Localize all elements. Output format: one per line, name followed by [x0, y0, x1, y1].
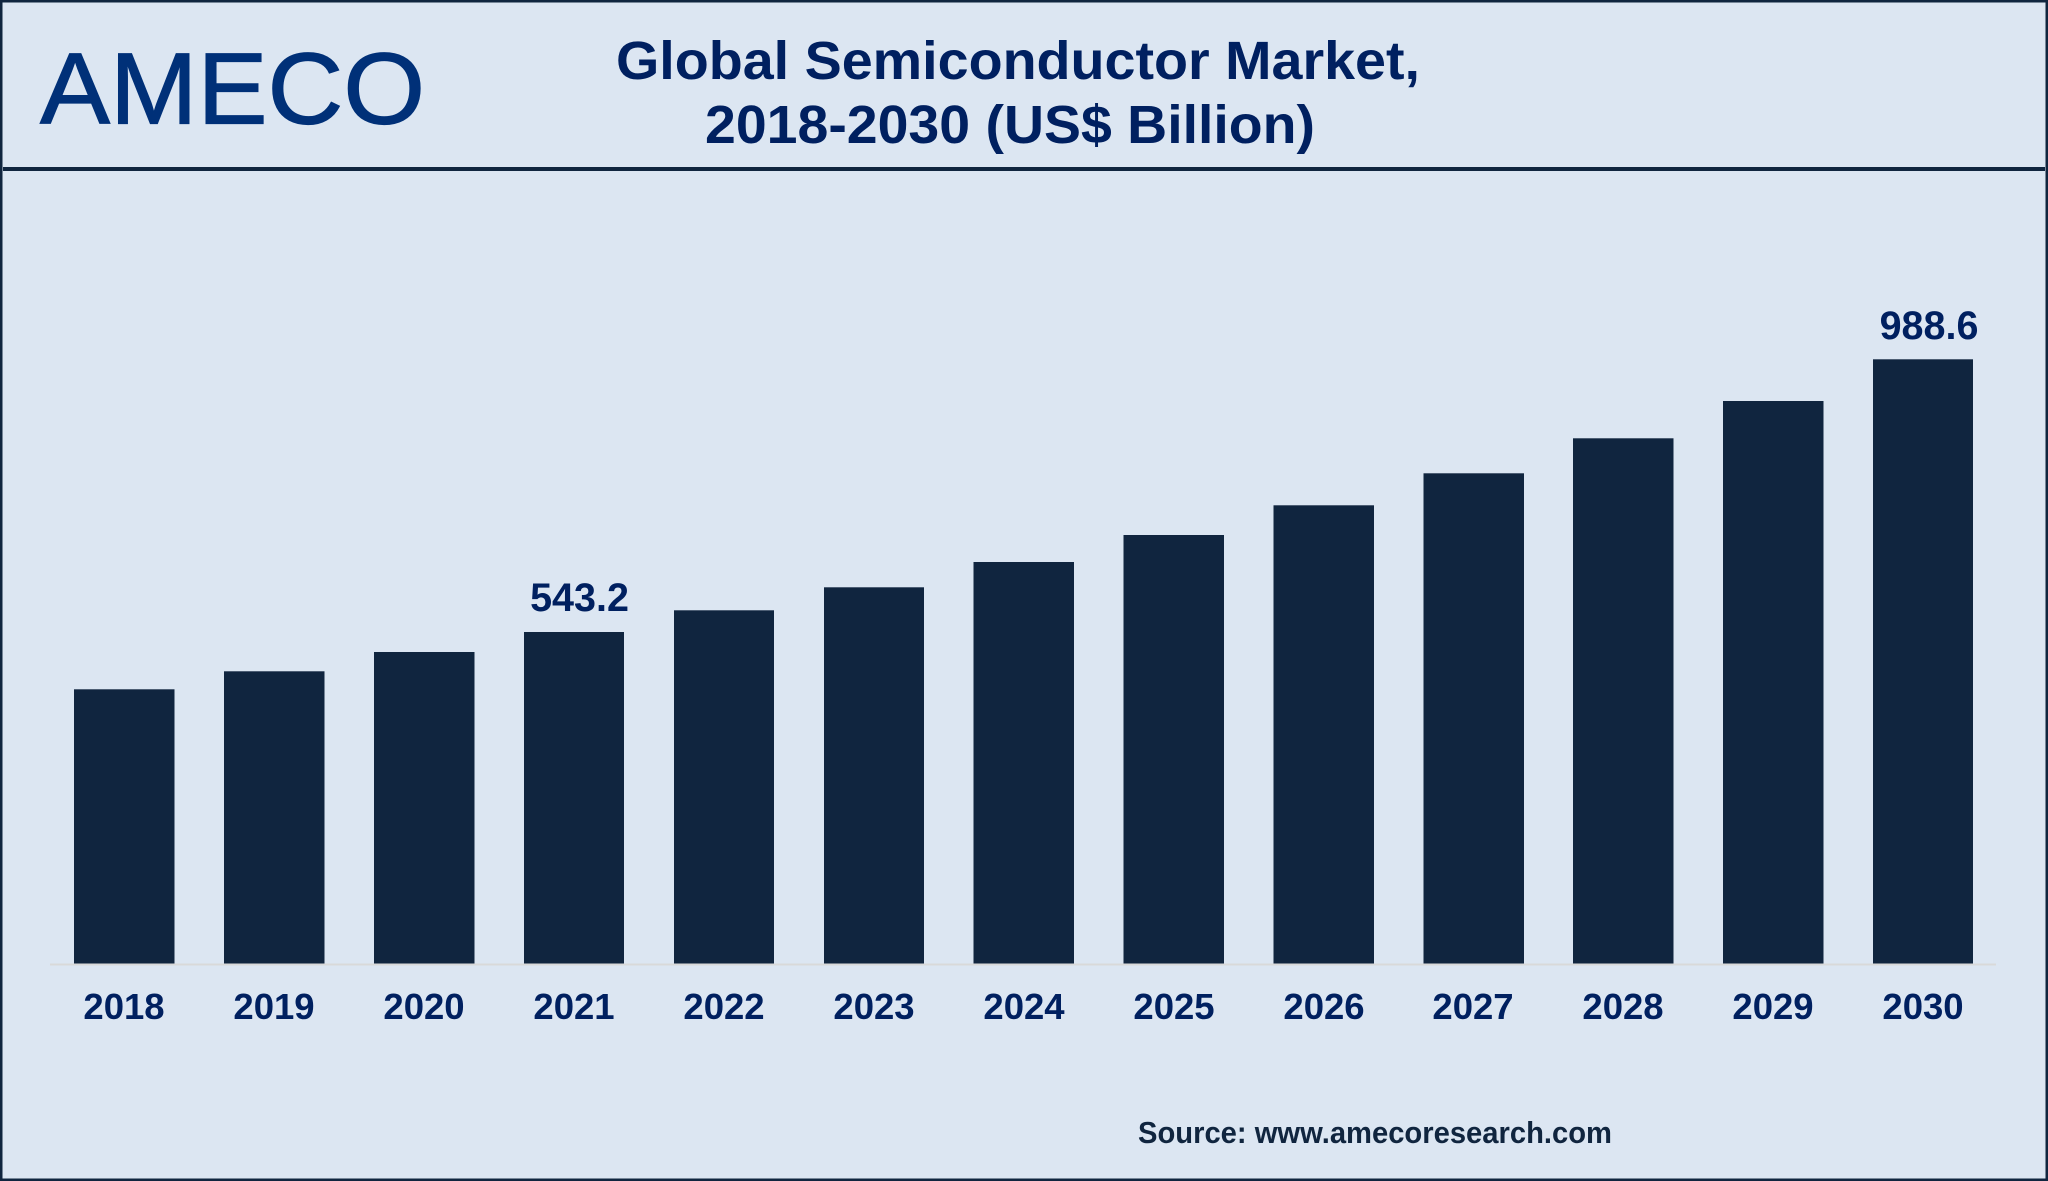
year labels: 2024	[983, 986, 1065, 1027]
axis baseline	[50, 964, 1996, 966]
value labels	[530, 304, 1978, 620]
year labels: 2026	[1283, 986, 1365, 1027]
bar chart	[50, 304, 1996, 1027]
title: Global Semiconductor Market,	[616, 31, 1420, 91]
bars	[74, 359, 1973, 964]
title: 2018-2030 (US$ Billion)	[705, 95, 1315, 155]
year labels: 2019	[233, 986, 315, 1027]
year labels: 2020	[383, 986, 465, 1027]
year labels: 2029	[1732, 986, 1814, 1027]
year labels: 2022	[683, 986, 765, 1027]
year labels: 2021	[533, 986, 615, 1027]
value labels: 543.2	[530, 576, 629, 620]
source note: Source: www.amecoresearch.com	[1138, 1115, 1612, 1150]
header rule	[3, 167, 2045, 171]
title	[616, 31, 1420, 155]
logo: AMECO: AMECO	[40, 34, 425, 146]
year labels: 2030	[1882, 986, 1964, 1027]
year labels: 2025	[1133, 986, 1215, 1027]
year labels: 2027	[1432, 986, 1514, 1027]
year labels	[83, 986, 1964, 1027]
year labels: 2028	[1582, 986, 1664, 1027]
year labels: 2018	[83, 986, 165, 1027]
year labels: 2023	[833, 986, 915, 1027]
value labels: 988.6	[1880, 304, 1978, 348]
